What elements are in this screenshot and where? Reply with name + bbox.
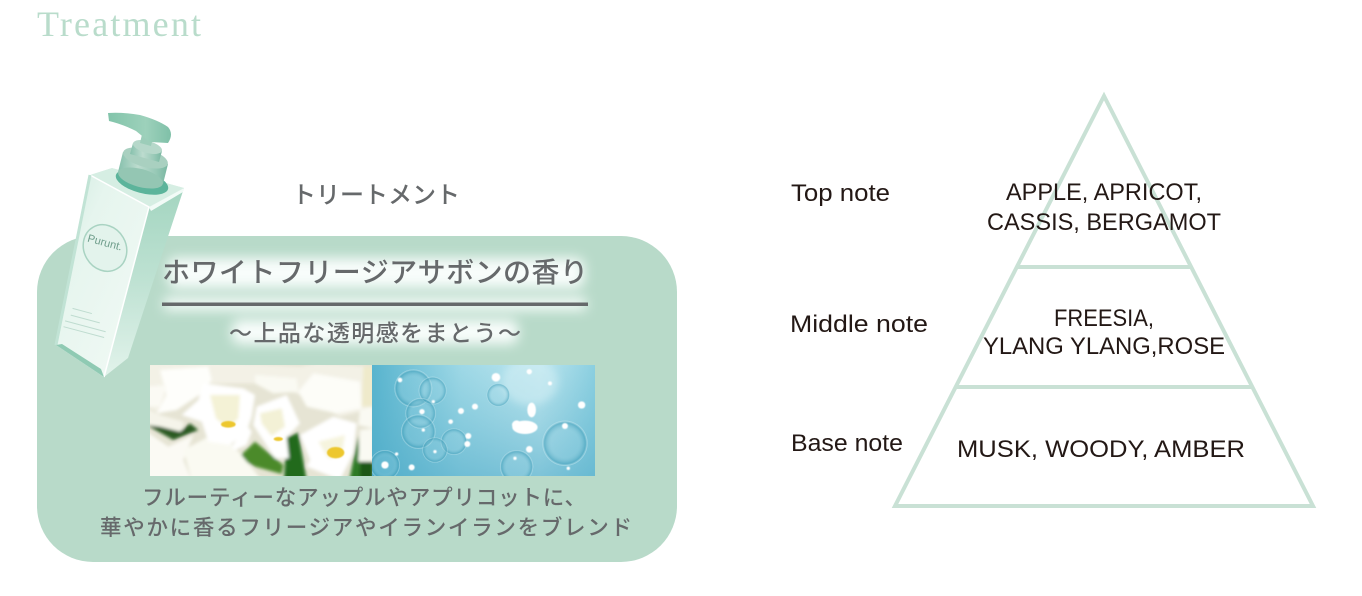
note labels: Middle note [790,311,928,338]
heading: treatment label: トリートメント [292,182,460,209]
body text: 華やかに香るフリージアやイランイランをブレンド [100,515,632,540]
photo: white freesia [147,362,373,480]
body text [100,486,632,540]
heading: scent name: ホワイトフリージアサボンの香り [162,257,588,288]
glow behind headings [164,258,586,344]
subheading: ～上品な透明感をまとう～ [229,320,521,346]
top note ingredients [987,179,1221,236]
heading underline [162,302,588,306]
top note ingredients: CASSIS, BERGAMOT [987,209,1221,236]
middle note ingredients [983,305,1225,360]
title: Treatment [37,4,201,44]
body text: フルーティーなアップルやアプリコットに、 [142,486,586,510]
bottle label: Purunt. [86,233,123,253]
base note ingredients: MUSK, WOODY, AMBER [957,436,1245,463]
note labels [790,180,928,457]
middle note ingredients: FREESIA, [1054,305,1154,332]
top note ingredients: APPLE, APRICOT, [1006,179,1202,206]
chart: fragrance pyramid [895,96,1313,506]
panel: fragrance description [37,182,677,562]
pump [108,113,171,200]
note labels: Base note [791,430,903,457]
icon: pump bottle [56,113,184,377]
note labels: Top note [791,180,890,207]
middle note ingredients: YLANG YLANG,ROSE [983,333,1225,360]
bottle label [64,217,135,338]
bottle body [56,168,184,377]
photo: bubbles [372,365,595,476]
